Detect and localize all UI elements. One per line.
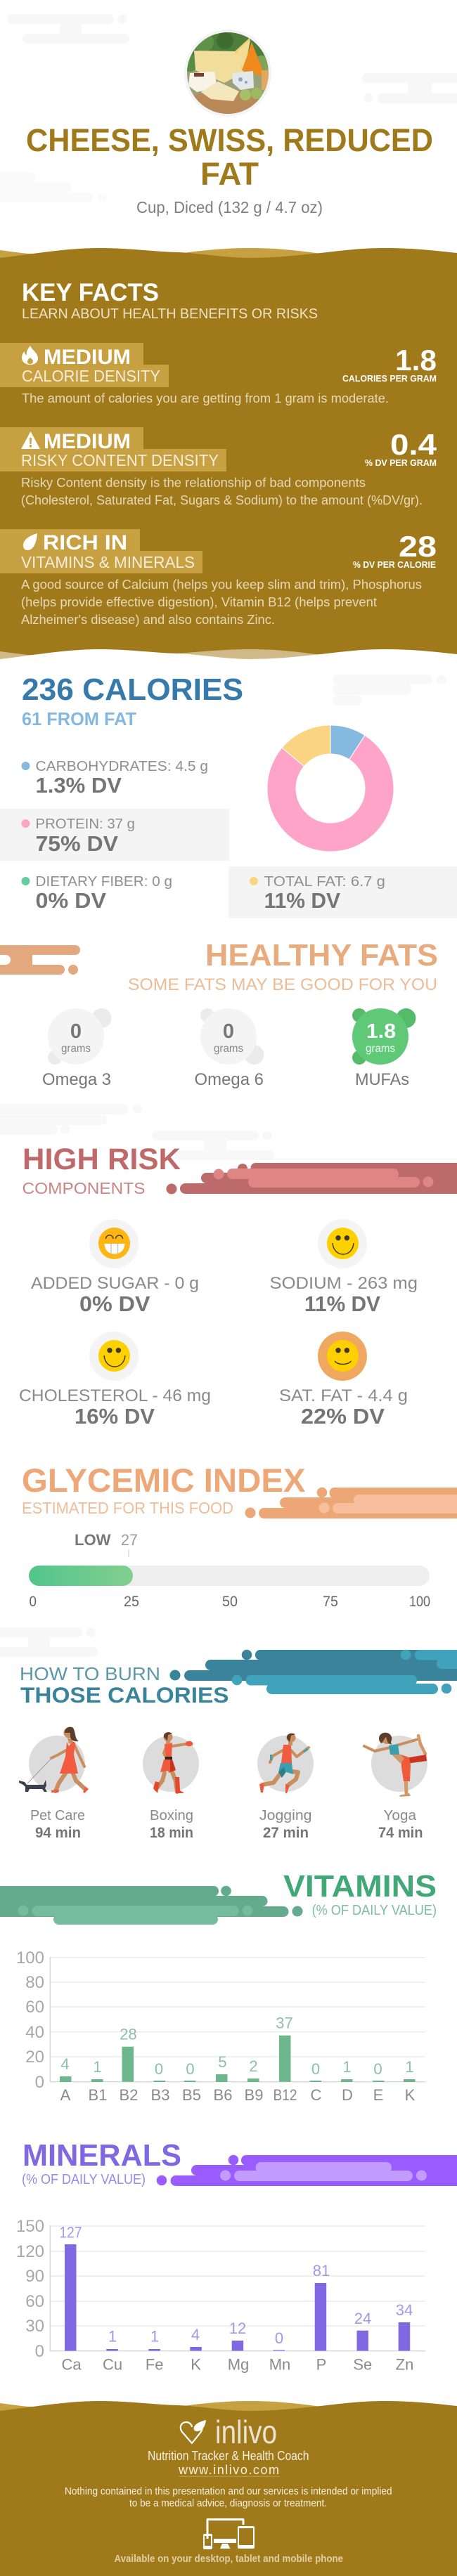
heading: how to burn: HOW TO BURN <box>20 1663 160 1684</box>
bar chart: vitamins: E <box>373 2086 383 2104</box>
fact: vitamins and minerals: VITAMINS & MINERALS <box>21 553 195 571</box>
risk: cholesterol <box>19 1332 211 1429</box>
fact: vitamins and minerals: (helps provide effective digestion), Vitamin B12 (helps prevent <box>21 595 377 609</box>
bar chart: vitamins: 20 <box>25 2048 44 2067</box>
panel: key facts <box>0 248 457 665</box>
bar chart: minerals: Zn <box>396 2356 413 2374</box>
bar chart: minerals: 1 <box>108 2328 117 2346</box>
heading ribbon <box>245 1488 457 1518</box>
bar chart: minerals: 60 <box>25 2292 44 2311</box>
fact: calorie density: CALORIES PER GRAM <box>342 374 437 384</box>
risk: saturated fat: SAT. FAT - 4.4 g <box>279 1386 408 1405</box>
heading: vitamins <box>283 1870 437 1918</box>
activity: pet care: Pet Care <box>30 1808 85 1823</box>
legend: dietary fiber: DIETARY FIBER: 0 g <box>35 874 172 890</box>
bar chart: vitamins: B2 <box>120 2086 138 2104</box>
heading: minerals: MINERALS <box>22 2139 181 2173</box>
bar chart: vitamins: 60 <box>25 1998 44 2017</box>
activity: yoga: Yoga <box>384 1808 417 1823</box>
heading ribbon <box>157 2155 457 2186</box>
stat: mufas: grams <box>366 1043 395 1055</box>
icon: warning triangle <box>21 431 40 449</box>
icon: grinning face <box>98 1228 130 1259</box>
bar chart: minerals: 120 <box>16 2242 44 2261</box>
heading: healthy fats: HEALTHY FATS <box>205 938 438 972</box>
gauge bar <box>29 1566 430 1586</box>
heading: calories: 236 CALORIES <box>22 673 243 707</box>
icon: boxer <box>153 1732 193 1793</box>
legend: protein: 75% DV <box>35 831 118 856</box>
gauge scale: 50 <box>222 1594 238 1610</box>
legend: protein: PROTEIN: 37 g <box>35 817 135 832</box>
bar chart: minerals: 34 <box>396 2301 413 2319</box>
bar chart: minerals: 0 <box>35 2342 44 2361</box>
gauge scale: 0 <box>30 1594 37 1610</box>
bar chart: minerals: 127 <box>59 2223 82 2241</box>
bar chart: vitamins: B9 <box>245 2086 263 2104</box>
bar chart: vitamins: B1 <box>89 2086 107 2104</box>
legend: total fat: 11% DV <box>264 888 340 913</box>
bar chart: minerals: 0 <box>275 2329 283 2347</box>
bar chart: minerals: Se <box>353 2356 372 2374</box>
stat: omega 3 <box>42 1008 111 1089</box>
legend: carbohydrates: 1.3% DV <box>35 773 122 798</box>
logo: inlivo: inlivo <box>215 2414 277 2450</box>
panel: how to burn <box>19 1650 457 1841</box>
risk: cholesterol: 16% DV <box>75 1404 155 1429</box>
legend: dietary fiber: 0% DV <box>35 888 106 913</box>
legend: protein <box>21 817 135 856</box>
fact: risky content density: 0.4 <box>390 428 437 461</box>
bar chart: minerals: Cu <box>103 2356 122 2374</box>
panel: high risk <box>19 1143 457 1429</box>
heading: how to burn <box>20 1663 229 1707</box>
fact: vitamins and minerals: % DV PER CALORIE <box>353 560 436 570</box>
panel: vitamins <box>0 1870 437 2104</box>
heading: high risk <box>22 1143 181 1197</box>
icon: woman walking dog <box>19 1727 89 1793</box>
disclaimer: Nothing contained in this presentation and our services is intended or implied <box>65 2485 392 2497</box>
heading: key facts <box>22 279 318 322</box>
icon: flame <box>22 346 38 365</box>
heading: minerals <box>22 2139 181 2187</box>
risk: added sugar <box>31 1219 199 1316</box>
fact: risky content density: MEDIUM <box>44 430 131 453</box>
gauge scale: 100 <box>409 1594 430 1610</box>
heading: glycemic index: ESTIMATED FOR THIS FOOD <box>22 1499 233 1517</box>
heading: vitamins: VITAMINS <box>283 1870 437 1904</box>
heading ribbon <box>0 1886 302 1925</box>
risk: sodium: 11% DV <box>304 1292 380 1316</box>
gauge scale: 25 <box>124 1594 139 1610</box>
heading: key facts: LEARN ABOUT HEALTH BENEFITS OR RISKS <box>22 306 318 322</box>
bar chart: minerals: 81 <box>313 2262 330 2279</box>
bar chart: vitamins: 0 <box>35 2073 44 2092</box>
fact: calorie density <box>0 343 437 405</box>
panel: minerals <box>16 2139 457 2374</box>
bar chart: vitamins: 80 <box>25 1973 44 1992</box>
fact: calorie density: The amount of calories you are getting from 1 gram is moderate. <box>22 391 389 405</box>
panel: glycemic index <box>22 1462 457 1610</box>
legend: total fat: TOTAL FAT: 6.7 g <box>264 874 385 890</box>
gauge value: LOW <box>75 1531 111 1549</box>
risk: saturated fat: 22% DV <box>301 1404 385 1429</box>
gauge scale: 75 <box>323 1594 338 1610</box>
legend: carbohydrates <box>21 759 208 798</box>
activity: yoga <box>364 1733 427 1841</box>
heading: glycemic index: GLYCEMIC INDEX <box>22 1462 305 1499</box>
fact: calorie density: CALORIE DENSITY <box>22 367 160 385</box>
stat: omega 6: 0 <box>223 1020 234 1043</box>
bar chart: vitamins: B6 <box>214 2086 232 2104</box>
fact: vitamins and minerals: 28 <box>399 530 437 563</box>
activity: boxing: Boxing <box>150 1808 193 1823</box>
bar chart: vitamins: 1 <box>93 2058 102 2076</box>
stat: mufas: MUFAs <box>355 1070 409 1089</box>
icon: leaf <box>23 533 37 550</box>
bar chart: vitamins: 0 <box>186 2060 195 2078</box>
activity: pet care <box>19 1727 89 1841</box>
icon: devices <box>203 2518 255 2549</box>
icon: smiling face <box>327 1228 359 1259</box>
legend: dietary fiber <box>21 874 172 913</box>
bar chart: minerals: Ca <box>62 2356 82 2374</box>
legend: total fat <box>250 874 385 913</box>
stat: omega 3: Omega 3 <box>42 1070 111 1089</box>
icon: mild smile face <box>327 1340 359 1372</box>
disclaimer <box>65 2485 392 2509</box>
activity: yoga: 74 min <box>378 1825 423 1841</box>
donut chart <box>267 725 394 852</box>
legend panels <box>0 809 457 918</box>
stat: omega 6: Omega 6 <box>194 1070 264 1089</box>
bar chart: minerals: 90 <box>25 2267 44 2286</box>
icon: smiling face <box>98 1340 130 1372</box>
heading ribbon <box>166 1163 457 1195</box>
bar chart: minerals: 4 <box>191 2326 200 2343</box>
gauge value <box>75 1531 138 1557</box>
heading: vitamins: (% OF DAILY VALUE) <box>312 1903 437 1918</box>
heading: minerals: (% OF DAILY VALUE) <box>22 2172 146 2187</box>
heading: how to burn: THOSE CALORIES <box>20 1682 229 1707</box>
activity: pet care: 94 min <box>35 1825 81 1841</box>
tagline: Nutrition Tracker & Health Coach <box>148 2449 309 2463</box>
heading: healthy fats: SOME FATS MAY BE GOOD FOR YOU <box>128 975 437 994</box>
bar chart: minerals: 150 <box>16 2217 44 2236</box>
availability note: Available on your desktop, tablet and mobile phone <box>114 2553 343 2565</box>
bar chart: vitamins: A <box>60 2086 71 2104</box>
bar chart: vitamins: 1 <box>405 2058 414 2076</box>
bar chart: minerals: 1 <box>150 2328 159 2346</box>
title: CHEESE, SWISS, REDUCED <box>26 122 433 158</box>
stat: omega 6: grams <box>214 1043 243 1055</box>
heading: glycemic index <box>22 1462 305 1517</box>
fact: risky content density <box>0 427 437 507</box>
activity: boxing <box>143 1732 199 1841</box>
bar chart: minerals: Mn <box>269 2356 290 2374</box>
bar chart: vitamins: 0 <box>311 2060 320 2078</box>
title: FAT <box>200 156 259 192</box>
disclaimer: to be a medical advice, diagnosis or treatment. <box>129 2497 327 2509</box>
bar chart: vitamins: 28 <box>120 2026 137 2043</box>
bar chart: vitamins: 1 <box>342 2058 352 2076</box>
risk: cholesterol: CHOLESTEROL - 46 mg <box>19 1386 211 1405</box>
stat: omega 3: 0 <box>70 1020 82 1043</box>
stat: omega 3: grams <box>61 1043 91 1055</box>
risk: added sugar: ADDED SUGAR - 0 g <box>31 1274 199 1293</box>
fact: risky content density: Risky Content density is the relationship of bad components <box>21 476 366 490</box>
gauge scale <box>30 1594 430 1610</box>
activity: jogging <box>257 1733 314 1841</box>
bar chart: vitamins: C <box>311 2086 322 2104</box>
bar chart: vitamins: D <box>342 2086 353 2104</box>
fact: vitamins and minerals <box>0 529 437 627</box>
bar chart: minerals: Mg <box>228 2356 249 2374</box>
bar chart: vitamins: 37 <box>276 2015 293 2032</box>
risk: added sugar: 0% DV <box>79 1292 150 1316</box>
bar chart: vitamins: 2 <box>249 2057 258 2075</box>
gauge value: 27 <box>121 1531 138 1549</box>
fact: risky content density: (Cholesterol, Saturated Fat, Sugars & Sodium) to the amount (%DV/gr). <box>21 493 423 507</box>
fact: calorie density: 1.8 <box>395 344 437 377</box>
bar chart: vitamins <box>16 1949 425 2104</box>
bar chart: vitamins: B12 <box>273 2086 297 2104</box>
fact: vitamins and minerals: RICH IN <box>43 531 127 554</box>
risk: sodium: SODIUM - 263 mg <box>270 1274 418 1293</box>
bar chart: minerals: P <box>316 2356 326 2374</box>
panel: calories <box>0 673 457 918</box>
heading: high risk: HIGH RISK <box>22 1143 181 1176</box>
bar chart: vitamins: 4 <box>60 2055 70 2073</box>
bar chart: minerals: 12 <box>229 2320 246 2337</box>
title <box>26 122 433 192</box>
icon: yoga dancer pose <box>364 1733 427 1797</box>
fact: risky content density: RISKY CONTENT DENSITY <box>21 451 219 469</box>
logo: inlivo <box>181 2414 277 2450</box>
stat: omega 6 <box>194 1008 264 1089</box>
risk: sodium <box>270 1219 418 1316</box>
fact: calorie density: MEDIUM <box>44 346 131 369</box>
fact: vitamins and minerals: A good source of Calcium (helps you keep slim and trim), Phosphorus <box>21 578 422 592</box>
risk: saturated fat <box>279 1332 408 1429</box>
heading ribbon <box>170 1650 457 1694</box>
activity: boxing: 18 min <box>150 1825 193 1841</box>
panel: healthy fats <box>0 938 438 1089</box>
footer <box>0 2401 457 2576</box>
bar chart: minerals: 24 <box>354 2310 371 2327</box>
bar chart: vitamins: 5 <box>218 2053 227 2071</box>
bar chart: vitamins: B5 <box>182 2086 201 2104</box>
activity: jogging: 27 min <box>263 1825 309 1841</box>
stat: mufas <box>352 1008 416 1089</box>
bar chart: vitamins: K <box>405 2086 416 2104</box>
heading ribbon <box>0 945 80 975</box>
bar chart: minerals: Fe <box>146 2356 164 2374</box>
activity: jogging: Jogging <box>259 1808 312 1823</box>
icon: runner <box>259 1733 309 1793</box>
heading: high risk: COMPONENTS <box>22 1179 145 1197</box>
bar chart: minerals: K <box>191 2356 201 2374</box>
bar chart: vitamins: 100 <box>16 1949 44 1967</box>
bar chart: vitamins: 0 <box>155 2060 163 2078</box>
heading: calories <box>22 673 243 729</box>
stat: mufas: 1.8 <box>366 1020 396 1043</box>
bar chart: minerals: 30 <box>25 2317 44 2336</box>
bar chart: vitamins: 0 <box>373 2060 382 2078</box>
fact: risky content density: % DV PER GRAM <box>365 458 437 468</box>
fact: vitamins and minerals: Alzheimer's disease) and also contains Zinc. <box>21 613 275 627</box>
bar chart: vitamins: 40 <box>25 2023 44 2042</box>
heading: healthy fats <box>128 938 438 994</box>
heading: calories: 61 FROM FAT <box>22 710 136 729</box>
website link: www.inlivo.com <box>178 2463 279 2477</box>
serving size: Cup, Diced (132 g / 4.7 oz) <box>136 198 323 216</box>
heading: key facts: KEY FACTS <box>22 279 159 306</box>
food photo: cheese platter <box>184 30 271 117</box>
bar chart: minerals <box>16 2217 425 2374</box>
bar chart: vitamins: B3 <box>151 2086 169 2104</box>
legend: carbohydrates: CARBOHYDRATES: 4.5 g <box>35 759 208 774</box>
